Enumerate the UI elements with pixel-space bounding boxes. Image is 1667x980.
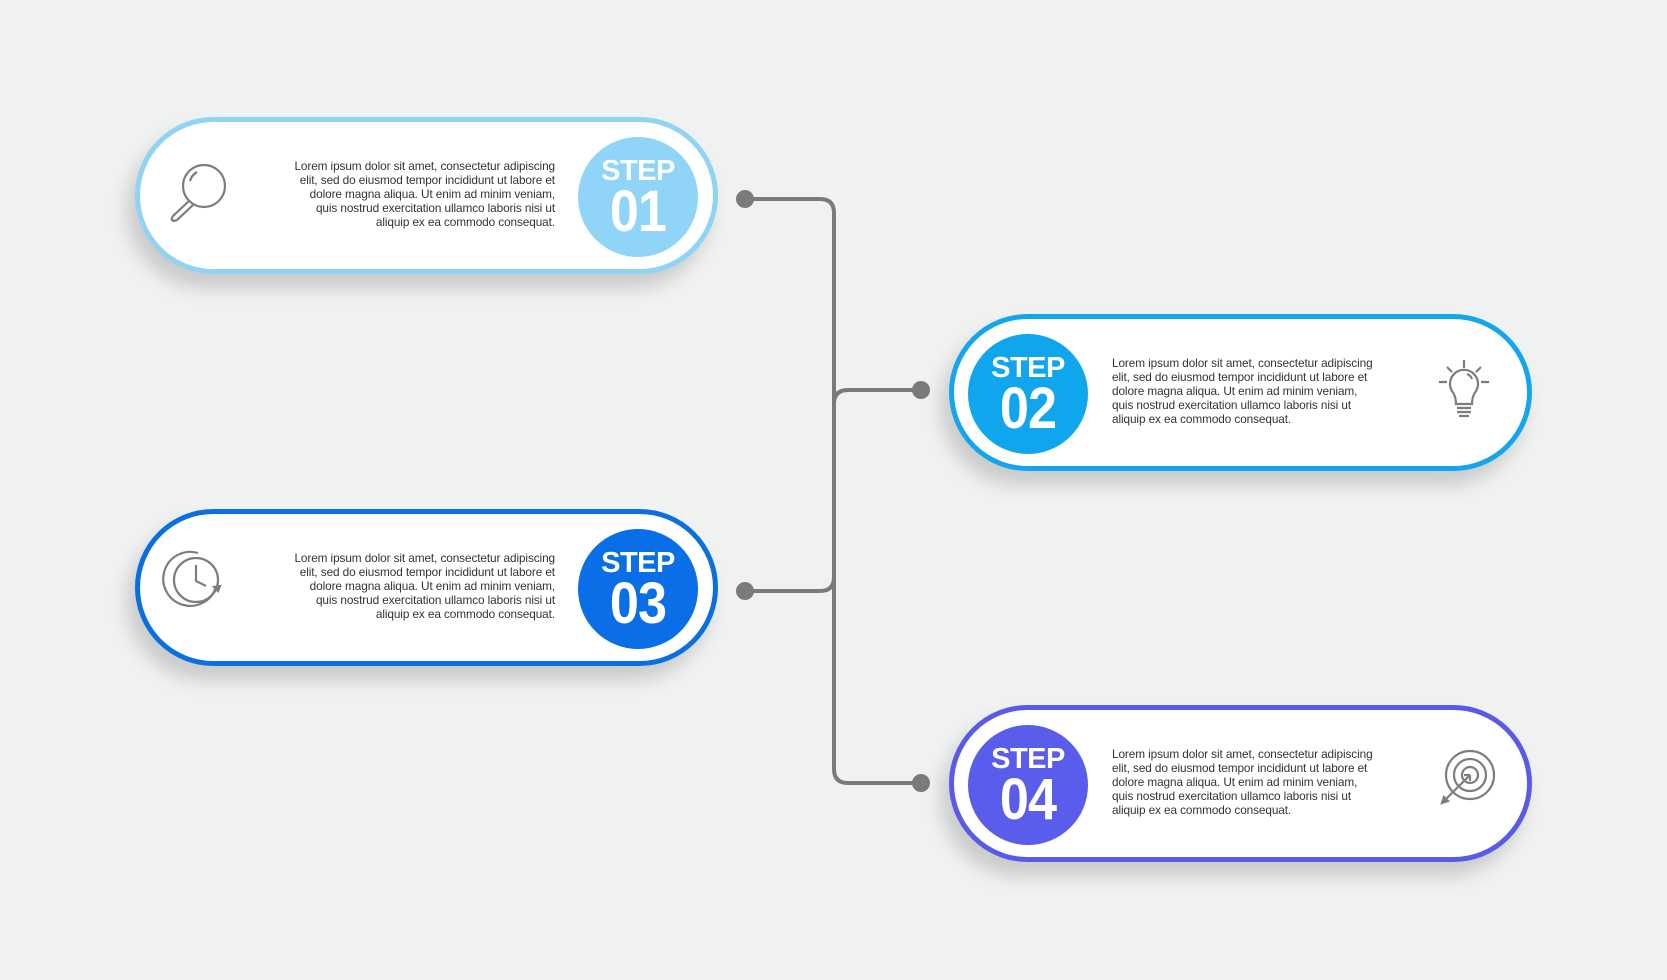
- text block: elit, sed do eiusmod tempor incididunt ut labore et: [300, 565, 555, 579]
- step badge 01: [578, 137, 698, 257]
- step badge 01: 01: [610, 179, 666, 244]
- text block: [294, 159, 556, 229]
- text block: dolore magna aliqua. Ut enim ad minim veniam,: [310, 187, 555, 201]
- text block: quis nostrud exercitation ullamco laboris nisi ut: [1112, 398, 1351, 412]
- text block: aliquip ex ea commodo consequat.: [376, 607, 555, 621]
- step badge 01: STEP: [601, 155, 675, 187]
- panel: step 04: [949, 705, 1532, 862]
- text block: dolore magna aliqua. Ut enim ad minim veniam,: [310, 579, 555, 593]
- step badge 03: [578, 529, 698, 649]
- text block: [1112, 747, 1373, 817]
- text block: Lorem ipsum dolor sit amet, consectetur adipiscing: [1112, 356, 1373, 370]
- step badge 02: STEP: [991, 352, 1065, 384]
- text block: Lorem ipsum dolor sit amet, consectetur adipiscing: [1112, 747, 1373, 761]
- text block: quis nostrud exercitation ullamco laboris nisi ut: [316, 593, 555, 607]
- panel: step 01: [135, 117, 718, 274]
- text block: aliquip ex ea commodo consequat.: [1112, 412, 1291, 426]
- panel: step 02: [949, 314, 1532, 471]
- text block: Lorem ipsum dolor sit amet, consectetur adipiscing: [294, 551, 555, 565]
- text block: [294, 551, 556, 621]
- icon: target: [1440, 750, 1496, 805]
- step badge 04: 04: [1000, 767, 1056, 832]
- text block: Lorem ipsum dolor sit amet, consectetur adipiscing: [294, 159, 555, 173]
- text block: elit, sed do eiusmod tempor incididunt ut labore et: [1112, 761, 1367, 775]
- icon: light bulb: [1439, 360, 1489, 418]
- icon: clock: [162, 550, 222, 607]
- text block: dolore magna aliqua. Ut enim ad minim veniam,: [1112, 775, 1357, 789]
- text block: quis nostrud exercitation ullamco laboris nisi ut: [316, 201, 555, 215]
- step badge 02: 02: [1000, 376, 1056, 441]
- step badge 04: [968, 725, 1088, 845]
- step badge 04: STEP: [991, 743, 1065, 775]
- step badge 03: 03: [610, 571, 666, 636]
- text block: quis nostrud exercitation ullamco laboris nisi ut: [1112, 789, 1351, 803]
- text block: dolore magna aliqua. Ut enim ad minim veniam,: [1112, 384, 1357, 398]
- text block: [1112, 356, 1373, 426]
- text block: aliquip ex ea commodo consequat.: [376, 215, 555, 229]
- icon: magnifier: [170, 164, 226, 222]
- panel: step 03: [135, 509, 718, 666]
- text block: aliquip ex ea commodo consequat.: [1112, 803, 1291, 817]
- step badge 03: STEP: [601, 547, 675, 579]
- text block: elit, sed do eiusmod tempor incididunt ut labore et: [1112, 370, 1367, 384]
- text block: elit, sed do eiusmod tempor incididunt ut labore et: [300, 173, 555, 187]
- step badge 02: [968, 334, 1088, 454]
